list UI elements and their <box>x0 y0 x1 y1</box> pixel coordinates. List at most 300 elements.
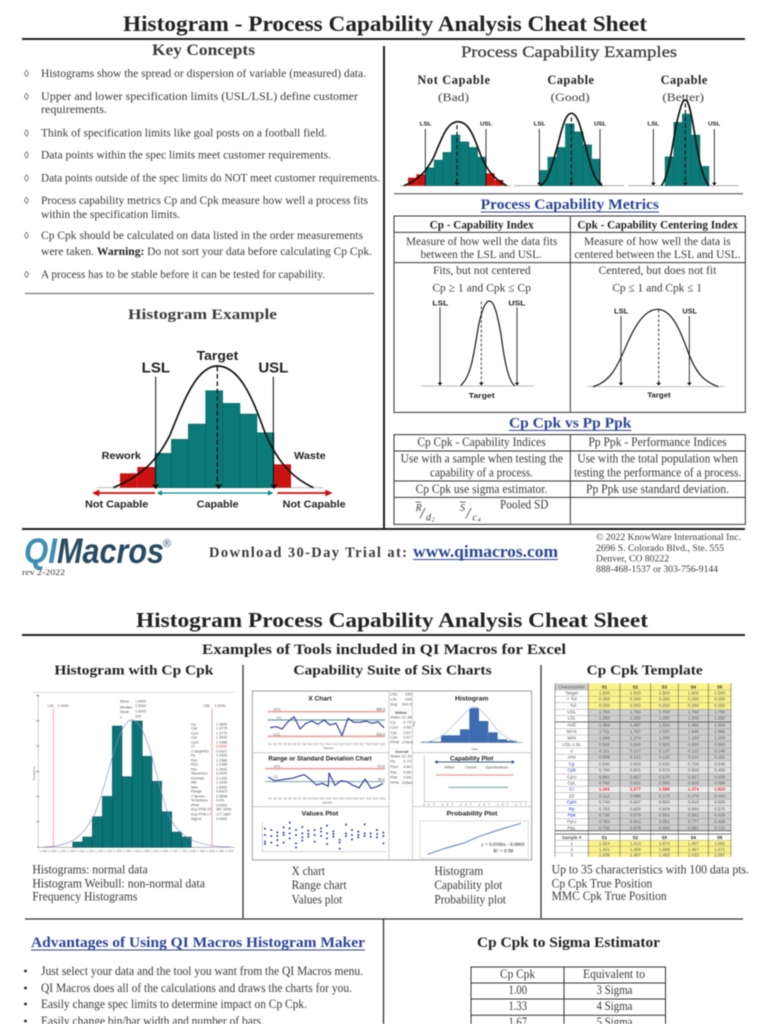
text: summary statistics column: LSL <box>390 696 398 701</box>
text: suite captions right: Histogram <box>434 864 484 878</box>
row values: 0.429 <box>714 813 726 818</box>
heading: advantages of using qi macros: Advantages of Using QI Macros Histogram Maker <box>31 935 366 951</box>
stats list: Exp PPM LT <box>191 812 212 816</box>
text: summary statistics column: 0.66 <box>403 774 412 779</box>
text: summary statistics column: 0.80 <box>403 724 412 729</box>
row values: 0.600 <box>659 800 670 805</box>
text: summary statistics column: Ppk <box>390 774 397 779</box>
panel: key concepts <box>24 42 380 294</box>
row values: 0.127 <box>630 748 641 753</box>
row values: 0.096 <box>630 793 641 798</box>
row labels: 1 <box>570 841 573 846</box>
chart: histogram <box>412 695 523 751</box>
row values: 0.526 <box>714 800 726 805</box>
chart: histogram: Histogram <box>455 695 489 702</box>
row values: 1.500 <box>599 691 610 696</box>
table: cp and cpk <box>394 216 745 412</box>
row values: 0.827 <box>688 774 699 779</box>
row values: 0.641 <box>630 819 641 824</box>
row values: 0.111 <box>599 748 610 753</box>
text: histogram captions <box>32 862 205 904</box>
stats list: Range <box>191 790 202 794</box>
row labels: 2 <box>570 847 573 852</box>
heading: process capability metrics: Process Capability Metrics <box>481 197 659 213</box>
stats list: 0.6597 <box>216 745 227 749</box>
chart: capable good <box>514 73 624 186</box>
table: sigma equivalents: 1.33 <box>508 999 527 1013</box>
row values: 0.736 <box>599 813 610 818</box>
heading: process capability examples: Process Capability Examples <box>461 44 677 61</box>
chart: annotated histogram: LSL <box>142 359 170 376</box>
chart: histogram output: 0 <box>37 845 39 849</box>
row values: 0.250 <box>659 697 670 702</box>
heading: histogram example: Histogram Example <box>128 307 277 323</box>
row labels: CpU <box>567 774 576 779</box>
list: key concept bullets: ◊ <box>24 92 29 103</box>
chart: fits but not centered <box>421 298 534 400</box>
stats list: Cp <box>191 722 196 726</box>
chart: histogram: Data <box>472 747 478 751</box>
chart: histogram output: LSL <box>48 704 54 708</box>
row values: 0.137 <box>659 748 670 753</box>
row values: 0.099 <box>599 755 610 760</box>
chart: histogram output: 25 <box>36 744 40 748</box>
chart: range chart: 28.0 <box>378 778 385 782</box>
table: cp cpk and pp ppk comparison: testing the performance of a process. <box>574 466 741 480</box>
chart: capable better: USL <box>708 122 721 128</box>
row values: 0.279 <box>688 793 699 798</box>
chart: probability plot: R² = 0.98 <box>493 848 514 854</box>
text: summary statistics column: Pp <box>390 758 396 763</box>
row values: 1.438 <box>599 852 610 857</box>
chart: centered but does not fit: Target <box>647 392 671 399</box>
text: summary statistics column: 0.67 <box>403 730 412 735</box>
stats list: PPM <box>191 803 199 807</box>
list: key concept bullets: ◊ <box>24 231 29 242</box>
stats list: 4.0000 <box>216 817 227 821</box>
chart: range chart: Range or Standard Deviation Chart <box>268 756 373 763</box>
row values: 1.250 <box>599 716 610 721</box>
list: advantages bullets: QI Macros does all of the calculations and draws the charts for you. <box>41 981 352 995</box>
panel: advantages <box>24 935 366 1024</box>
row values: 0.579 <box>630 813 641 818</box>
row values: 1.236 <box>659 735 670 740</box>
row values: 0.409 <box>714 774 726 779</box>
table: cp and cpk: Cp ≤ 1 and Cpk ≤ 1 <box>612 280 702 294</box>
row values: 0.548 <box>714 761 726 766</box>
list: key concept bullets: Think of specification limits like goal posts on a football field. <box>41 128 327 140</box>
stats list: 1.3942 <box>216 736 227 740</box>
stats list: 1.3488 <box>216 740 227 744</box>
text: histogram captions: Frequency Histograms <box>32 890 138 904</box>
stats list: 0.1332 <box>216 776 227 780</box>
row values: 0.790 <box>599 780 610 785</box>
chart: histogram output: 1.000 1.050 1.100 1.150 1.200 1.250 1.300 1.350 1.400 1.450 1.500 1.550 1.600 1.650 1.700 1.750 1.800 1.850 1.900 1.950 2.000 <box>39 849 234 853</box>
row values: 1.431 <box>599 847 610 852</box>
row labels <box>558 684 586 858</box>
row values: 1.750 <box>630 710 641 715</box>
chart: histogram output: n <box>120 715 122 719</box>
row values: 0.250 <box>714 697 726 702</box>
chart: histogram output: 30 <box>36 719 40 723</box>
stats list: Cpk <box>191 727 198 731</box>
panel: histogram with cp cpk <box>32 662 235 904</box>
text: summary statistics column: Within <box>395 710 408 715</box>
row values: S2 <box>633 835 639 840</box>
row values: S1 <box>602 835 608 840</box>
stats list: 1.3775 <box>216 731 227 735</box>
chart: probability plot: Probability Plot <box>447 811 498 818</box>
stats list: CpU <box>191 731 199 735</box>
text: histogram captions: Histogram Weibull: non-normal data <box>32 876 205 890</box>
stats list: Z target/Dz <box>191 749 209 753</box>
text: summary statistics column: USL <box>390 692 399 697</box>
text: summary statistics column: 340 <box>405 692 412 697</box>
text: template captions: Up to 35 characteristics with 100 data pts. <box>552 862 749 876</box>
row labels: Cpk <box>568 768 576 773</box>
row values: S2 <box>633 684 639 689</box>
chart: annotated histogram: USL <box>258 359 288 376</box>
panel: cp cpk template <box>552 662 749 903</box>
chart: centered but does not fit: LSL <box>614 308 629 315</box>
logo: qi macros: Macros <box>57 532 164 571</box>
row values: 0.684 <box>688 806 699 811</box>
formula: r bar over d2: d <box>426 512 432 523</box>
chart: not capable: USL <box>480 122 493 128</box>
text: summary statistics column: 0.67 <box>403 735 412 740</box>
chart: histogram output: Mode <box>120 710 129 714</box>
text: summary statistics column: 0.80 <box>403 764 412 769</box>
row values: 1.483 <box>659 852 670 857</box>
chart: capable good: (Good) <box>551 90 590 104</box>
row values: 1.688 <box>659 847 670 852</box>
row values: 1.466 <box>688 723 699 728</box>
row values: 1.487 <box>630 852 641 857</box>
logo: qi macros: ® <box>163 538 171 550</box>
chart grid frame <box>252 691 532 860</box>
row values: 1.250 <box>659 716 670 721</box>
row values: 0.551 <box>659 813 670 818</box>
stats list: 1.3606 <box>216 722 227 726</box>
row values: 0.500 <box>688 742 699 747</box>
chart: not capable: (Bad) <box>438 90 469 104</box>
stats list: 0.0% <box>216 799 225 803</box>
row values: S5 <box>717 684 723 689</box>
row values: 1.587 <box>714 852 726 857</box>
row values: 0.601 <box>630 780 641 785</box>
row labels: Target <box>565 691 579 696</box>
chart: histogram: Freq. <box>412 720 416 727</box>
text: summary statistics column: 200 <box>405 696 412 701</box>
chart: range chart: CL <box>273 774 279 779</box>
chart: histogram output: 10 <box>36 820 40 824</box>
row values: 1.250 <box>630 716 641 721</box>
stats list: 0.6423 <box>216 790 227 794</box>
callout: download trial <box>209 542 558 561</box>
text: company address: 888-468-1537 or 303-756-9144 <box>596 564 718 575</box>
chart: centered but does not fit: USL <box>682 308 698 315</box>
row values: S1 <box>602 684 608 689</box>
stats list: Pp <box>191 754 195 758</box>
row values: 1.467 <box>688 847 699 852</box>
stats list: Kurtosis <box>191 776 204 780</box>
chart: not capable <box>400 73 511 186</box>
chart: histogram output: 35 <box>36 694 40 698</box>
stats list: 0.0000 <box>216 772 227 776</box>
row labels: Cpm <box>567 800 577 805</box>
text: summary statistics column: 27504 <box>402 740 414 745</box>
row labels: 3 <box>570 853 573 858</box>
row values: 0.736 <box>599 825 610 830</box>
row values: 1.497 <box>630 723 641 728</box>
chart: capable better: Capable <box>661 73 708 87</box>
table: cp and cpk: Cp - Capability Index <box>430 218 534 232</box>
row values: 1.191 <box>599 787 610 792</box>
footer: logo and contact band <box>22 532 741 577</box>
row values: 1.823 <box>714 787 726 792</box>
row values: 1.457 <box>688 841 699 846</box>
row labels: PpU <box>567 819 576 824</box>
row values: 0.666 <box>659 825 670 830</box>
table: cp cpk and pp ppk comparison: Cp Cpk use sigma estimator. <box>416 482 547 496</box>
chart: capability plot: Capability Plot <box>450 756 494 763</box>
chart: histogram output: Frequency <box>32 766 36 780</box>
row labels: MAX <box>567 729 578 734</box>
row values: 0.607 <box>630 800 641 805</box>
row values: 0.609 <box>659 806 670 811</box>
text: suite captions left: X chart <box>292 864 326 878</box>
table: cp and cpk: Fits, but not centered <box>433 263 531 277</box>
row values: 0.500 <box>599 742 610 747</box>
chart: histogram output: 1.5000 <box>135 699 146 703</box>
row labels: Characteristic <box>558 684 586 689</box>
formula: s bar over c4: S <box>460 503 465 514</box>
row values: 0.579 <box>630 825 641 830</box>
title: page one: Histogram - Process Capability Analysis Cheat Sheet <box>123 11 648 36</box>
row values: 0.629 <box>688 768 699 773</box>
row values: 1.750 <box>659 710 670 715</box>
row values: 1.164 <box>688 735 699 740</box>
row values: 1.837 <box>659 729 670 734</box>
table: cp cpk and pp ppk comparison: Pooled SD <box>500 498 548 512</box>
row values: 0.840 <box>599 761 610 766</box>
chart: capability plot <box>423 755 528 807</box>
chart: fits but not centered: USL <box>508 298 526 307</box>
row values: 0.429 <box>714 819 726 824</box>
row values: 1.691 <box>714 841 726 846</box>
row values: 0.570 <box>659 768 670 773</box>
heading: capability suite: Capability Suite of Six Charts <box>293 662 492 677</box>
row values: 0.250 <box>599 703 610 708</box>
table: cp cpk and pp ppk comparison: Use with a sample when testing the <box>401 451 563 465</box>
list: key concept bullets: within the specification limits. <box>41 209 180 221</box>
row values: 1.489 <box>599 723 610 728</box>
row values: 0.250 <box>630 697 641 702</box>
chart: annotated histogram: Not Capable <box>283 500 346 511</box>
chart: values plot: Values Plot <box>302 811 339 818</box>
chart: capability plot: Within <box>444 765 455 769</box>
row values: 1.750 <box>688 710 699 715</box>
table: cp cpk and pp ppk comparison: Pp Ppk use standard deviation. <box>586 482 729 496</box>
stats list: CpL <box>191 736 198 740</box>
chart: annotated histogram: Not Capable <box>85 500 149 511</box>
chart: annotated histogram: Rework <box>102 451 141 462</box>
row values: 1.163 <box>714 735 726 740</box>
row values: 0.409 <box>714 768 726 773</box>
row values: 0.250 <box>714 703 726 708</box>
chart: histogram output: 125 <box>135 715 141 719</box>
row labels: Sample # <box>562 835 582 840</box>
row values: 1.359 <box>630 847 641 852</box>
stats list: 1.1639 <box>216 781 227 785</box>
list: key concept bullets: requirements. <box>41 104 107 116</box>
chart: histogram output: 1.5000 <box>135 709 146 713</box>
list: key concept bullets: Histograms show the spread or dispersion of variable (measured) data. <box>41 68 366 80</box>
table: cp and cpk: Cpk - Capability Centering Index <box>577 218 738 232</box>
row values: 0.667 <box>630 774 641 779</box>
list: key concept bullets: Cp Cpk should be calculated on data listed in the order measurements <box>41 230 364 242</box>
row values: 1.500 <box>630 691 641 696</box>
chart: x chart: 335.0 <box>376 732 385 736</box>
table: cp cpk and pp ppk comparison: Use with the total population when <box>577 451 738 465</box>
row values: 0.619 <box>688 800 699 805</box>
chart: annotated histogram: Waste <box>294 451 326 462</box>
text: revision: rev 2-2022 <box>22 567 65 577</box>
text: suite captions left: Range chart <box>292 878 347 892</box>
chart: histogram output: 1.5004 <box>135 704 146 708</box>
stats list: Exp PPM ST <box>191 808 213 812</box>
row values: 1.564 <box>714 723 726 728</box>
chart: x chart: 388.6 <box>376 708 385 712</box>
text: summary statistics column: Stdev <box>390 754 401 759</box>
text: histogram captions: Histograms: normal data <box>32 862 148 876</box>
text: template captions: MMC Cpk True Position <box>552 889 667 903</box>
row values: 1.750 <box>599 710 610 715</box>
text: summary statistics column: CpL <box>390 730 398 735</box>
row values: 0.551 <box>659 819 670 824</box>
row values: 1.711 <box>599 729 610 734</box>
table: cp cpk and pp ppk comparison: capability of a process. <box>430 466 533 480</box>
text: suite captions right <box>434 864 507 906</box>
text: summary statistics column: 32.31 <box>402 754 412 759</box>
row labels: AVE <box>567 723 576 728</box>
row values: 0.500 <box>630 742 641 747</box>
text: company address: Denver, CO 80222 <box>596 554 669 564</box>
chart: histogram output: 20 <box>36 769 40 773</box>
chart: range chart: 62.6 <box>378 765 385 769</box>
table: cp and cpk: Measure of how well the data is <box>584 234 731 248</box>
table: cp and cpk: Measure of how well the data fits <box>406 234 558 248</box>
panel: cp cpk to sigma estimator <box>471 935 666 1024</box>
stats list: 1.2368 <box>216 763 227 767</box>
row values: 0.173 <box>659 793 670 798</box>
row values: S3 <box>662 684 668 689</box>
text: summary statistics column <box>390 692 414 785</box>
heading: key concepts: Key Concepts <box>152 42 255 59</box>
text: summary statistics column: 0.66 <box>403 769 412 774</box>
formula: r bar over d2 <box>415 502 435 523</box>
row values: 1.524 <box>659 723 670 728</box>
stats list: 357.3259 <box>216 808 231 812</box>
row values: 1.433 <box>688 852 699 857</box>
table: sigma equivalents: 3 Sigma <box>596 983 633 997</box>
row labels: USL <box>567 710 577 715</box>
row values: 0.791 <box>599 819 610 824</box>
chart: histogram output: Mean <box>120 699 129 703</box>
text: summary statistics column: 0.73 <box>403 758 412 763</box>
row values <box>599 684 726 857</box>
list: key concept bullets: Data points outside of the spec limits do NOT meet customer requirements. <box>41 172 380 184</box>
row values: 0.250 <box>599 697 610 702</box>
row values: 0.114 <box>688 755 699 760</box>
row values: 1.324 <box>599 841 610 846</box>
chart: histogram output: USL <box>203 704 210 708</box>
chart: values plot <box>262 811 387 852</box>
row values: 1.250 <box>714 716 726 721</box>
stats list: 1.3775 <box>216 727 227 731</box>
row values: 1.767 <box>630 729 641 734</box>
text: summary statistics column: Cp <box>390 720 396 725</box>
text: summary statistics column: Avg <box>390 701 397 706</box>
heading: cp cpk template: Cp Cpk Template <box>587 662 703 677</box>
stats list: Ppk <box>191 758 197 762</box>
list: advantages bullets: Easily change spec limits to determine impact on Cp Cpk. <box>41 997 307 1011</box>
heading: cp cpk vs pp ppk: Cp Cpk vs Pp Ppk <box>509 415 632 431</box>
panel: process capability metrics <box>394 197 745 412</box>
row values: 0.753 <box>599 806 610 811</box>
row labels: MIN <box>567 735 576 740</box>
chart: x chart: CL <box>277 715 283 720</box>
callout: download trial: www.qimacros.com <box>413 542 558 561</box>
chart: centered but does not fit <box>587 308 725 399</box>
chart: histogram output: 15 <box>36 795 40 799</box>
row values: 1.577 <box>630 787 641 792</box>
chart: capability plot: Specifications <box>486 765 508 769</box>
row values: 1.866 <box>714 729 726 734</box>
row values: 0.121 <box>630 755 641 760</box>
chart: histogram output: 2.0000 <box>214 704 226 708</box>
stats list: Min <box>191 781 197 785</box>
row labels: σmt <box>568 755 576 760</box>
chart: histogram output: Median <box>120 705 132 709</box>
table: sigma equivalents: 1.00 <box>508 983 527 997</box>
formula: r bar over d2: R <box>415 503 422 514</box>
list: key concept bullets: Process capability metrics Cp and Cpk measure how well a process fits <box>41 195 369 207</box>
row values: 0.630 <box>659 761 670 766</box>
stats list: 0.0000 <box>216 803 227 807</box>
row values: 0.688 <box>714 780 726 785</box>
table: sigma equivalents: 4 Sigma <box>596 999 633 1013</box>
chart: capable better <box>628 73 738 186</box>
stats list: 1.2368 <box>216 758 227 762</box>
row labels: CpL <box>567 780 576 785</box>
row values: 0.570 <box>659 774 670 779</box>
row values: 1.671 <box>714 847 726 852</box>
row values: 1.750 <box>714 710 726 715</box>
text: summary statistics column: 29564 <box>402 780 414 785</box>
text: company address: © 2022 KnowWare International Inc. <box>596 532 741 543</box>
row values: 0.601 <box>630 768 641 773</box>
row values: 0.122 <box>688 748 699 753</box>
row values: 0.500 <box>714 742 726 747</box>
panel: cp cpk vs pp ppk <box>394 415 745 524</box>
row labels: Cp <box>569 761 575 766</box>
row values: 0.740 <box>599 800 610 805</box>
row labels: USL-LSL <box>562 742 582 747</box>
row values: 1.500 <box>688 691 699 696</box>
row labels: σ <box>570 748 573 753</box>
panel: process capability examples <box>394 44 743 194</box>
